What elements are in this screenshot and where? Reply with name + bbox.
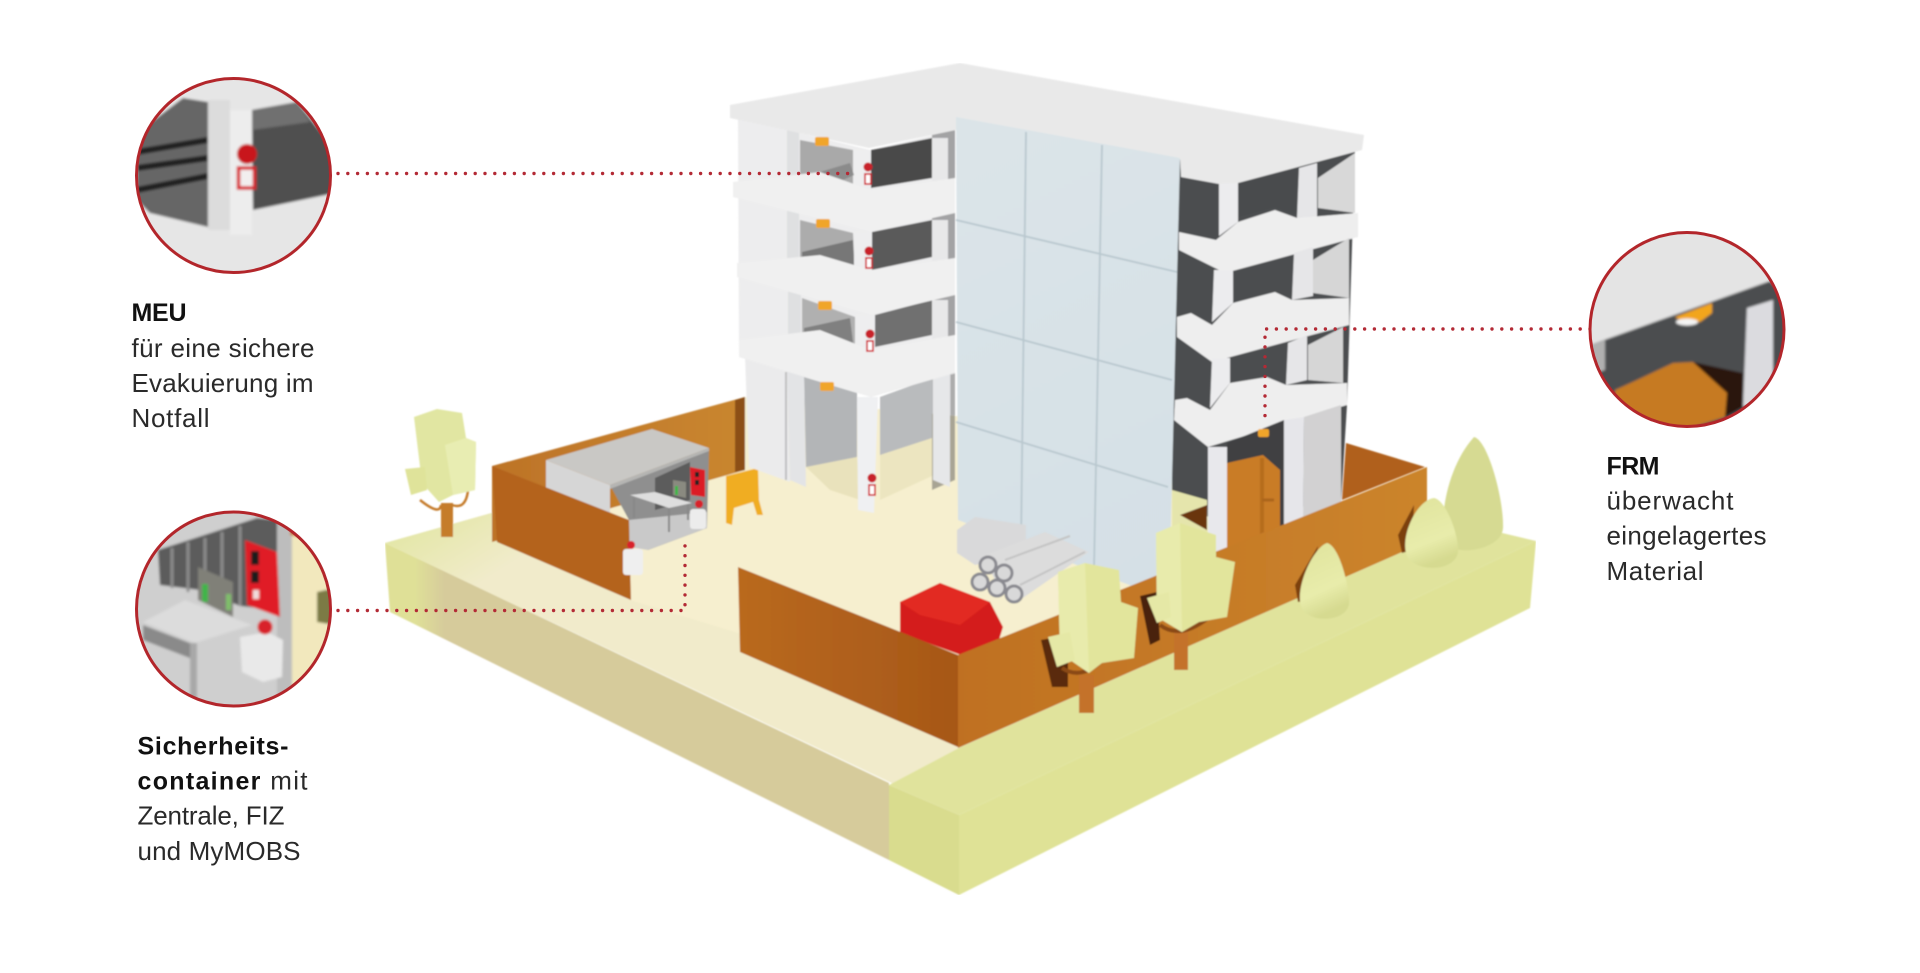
concrete block on top floor	[797, 163, 854, 196]
dotted leader: FRM	[1265, 329, 1590, 422]
stored material cabinet	[1227, 455, 1280, 560]
isometric construction site scene	[385, 63, 1536, 895]
right wing columns	[1208, 417, 1304, 565]
text block: Sicherheitscontainer: Zentrale, FIZ	[138, 800, 285, 830]
callout ring: Sicherheitscontainer	[136, 512, 330, 706]
white unit in container	[690, 500, 706, 529]
callout circle: FRM	[1592, 234, 1782, 425]
callout circle: MEU	[138, 80, 329, 271]
text block: MEU	[132, 299, 314, 433]
text block: FRM: eingelagertes	[1606, 520, 1766, 550]
bushes	[1295, 437, 1503, 619]
concrete pipes	[957, 517, 1089, 602]
text block: FRM: FRM	[1606, 452, 1660, 480]
text block: MEU: MEU	[132, 299, 186, 327]
back fence	[492, 397, 1425, 542]
tree left	[405, 409, 476, 537]
text block: MEU: für eine sichere	[132, 333, 314, 363]
yellow warning board	[726, 468, 763, 525]
left wing floor slabs	[733, 172, 955, 397]
dotted leader: MEU	[338, 172, 853, 175]
callout circle: Sicherheitscontainer	[138, 514, 329, 704]
orange sensors	[815, 137, 1269, 437]
text block: Sicherheitscontainer: Sicherheits-	[138, 732, 288, 760]
glass facade	[956, 117, 1180, 600]
building	[730, 63, 1364, 600]
text block: Sicherheitscontainer: und MyMOBS	[138, 836, 300, 866]
ground platform	[385, 397, 1536, 895]
callout ring: MEU	[136, 78, 330, 272]
callout ring: FRM	[1590, 232, 1784, 426]
tree right	[1140, 523, 1235, 670]
red skip	[900, 583, 1003, 655]
dotted leader: Sicherheitscontainer	[338, 541, 685, 610]
text block: Sicherheitscontainer: container mit	[138, 766, 308, 796]
roof	[730, 63, 1364, 184]
text block: Sicherheitscontainer	[138, 732, 308, 866]
tree centre	[1041, 563, 1138, 713]
front fence	[492, 466, 1427, 748]
text block: MEU: Notfall	[132, 403, 210, 433]
white unit on fence	[623, 541, 643, 575]
left wing back walls and columns	[738, 118, 955, 513]
text block: FRM	[1606, 452, 1766, 586]
text block: FRM: Material	[1606, 556, 1704, 586]
safety container	[546, 429, 709, 550]
right wing	[1172, 150, 1358, 560]
red MEU devices	[864, 162, 876, 495]
text block: MEU: Evakuierung im	[132, 368, 314, 398]
text block: FRM: überwacht	[1606, 486, 1734, 516]
